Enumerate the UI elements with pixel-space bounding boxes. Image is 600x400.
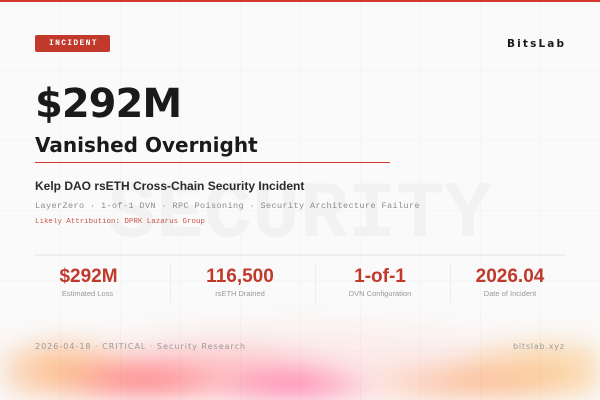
logo: BitsLab: BitsLab (507, 38, 566, 50)
headline subtitle: Vanished Overnight (35, 133, 258, 157)
stat label: date: Date of Incident (484, 288, 536, 298)
incident title: Kelp DAO rsETH Cross-Chain Security Incident (35, 179, 304, 193)
stat label: loss: Estimated Loss (62, 288, 113, 298)
stat divider 3 (450, 264, 451, 302)
stat value: DVN: 1-of-1 (354, 266, 406, 287)
watermark: SECURITY: SECURITY (108, 170, 492, 261)
footer left: 2026-04-18 · CRITICAL · Security Research (35, 342, 246, 351)
stat value: loss: $292M (59, 266, 118, 287)
stat value: date: 2026.04 (476, 266, 544, 287)
descriptor line: LayerZero · 1-of-1 DVN · RPC Poisoning · Security Architecture Failure (35, 201, 420, 211)
headline figure: $292M (35, 81, 181, 127)
stat divider 1 (170, 264, 171, 302)
stat label: DVN: DVN Configuration (349, 288, 411, 298)
stat label: drained: rsETH Drained (215, 288, 265, 298)
attribution line: Likely Attribution: DPRK Lazarus Group (35, 218, 205, 226)
top accent bar (0, 0, 600, 2)
stat divider 2 (315, 264, 316, 302)
red divider (35, 162, 390, 163)
badge: incident (35, 35, 110, 52)
stats panel (35, 254, 565, 256)
badge label: INCIDENT (49, 39, 98, 48)
stats top rule (35, 254, 565, 256)
background glow (0, 310, 600, 400)
footer right: bitslab.xyz (513, 342, 565, 351)
stat value: drained: 116,500 (206, 266, 274, 287)
